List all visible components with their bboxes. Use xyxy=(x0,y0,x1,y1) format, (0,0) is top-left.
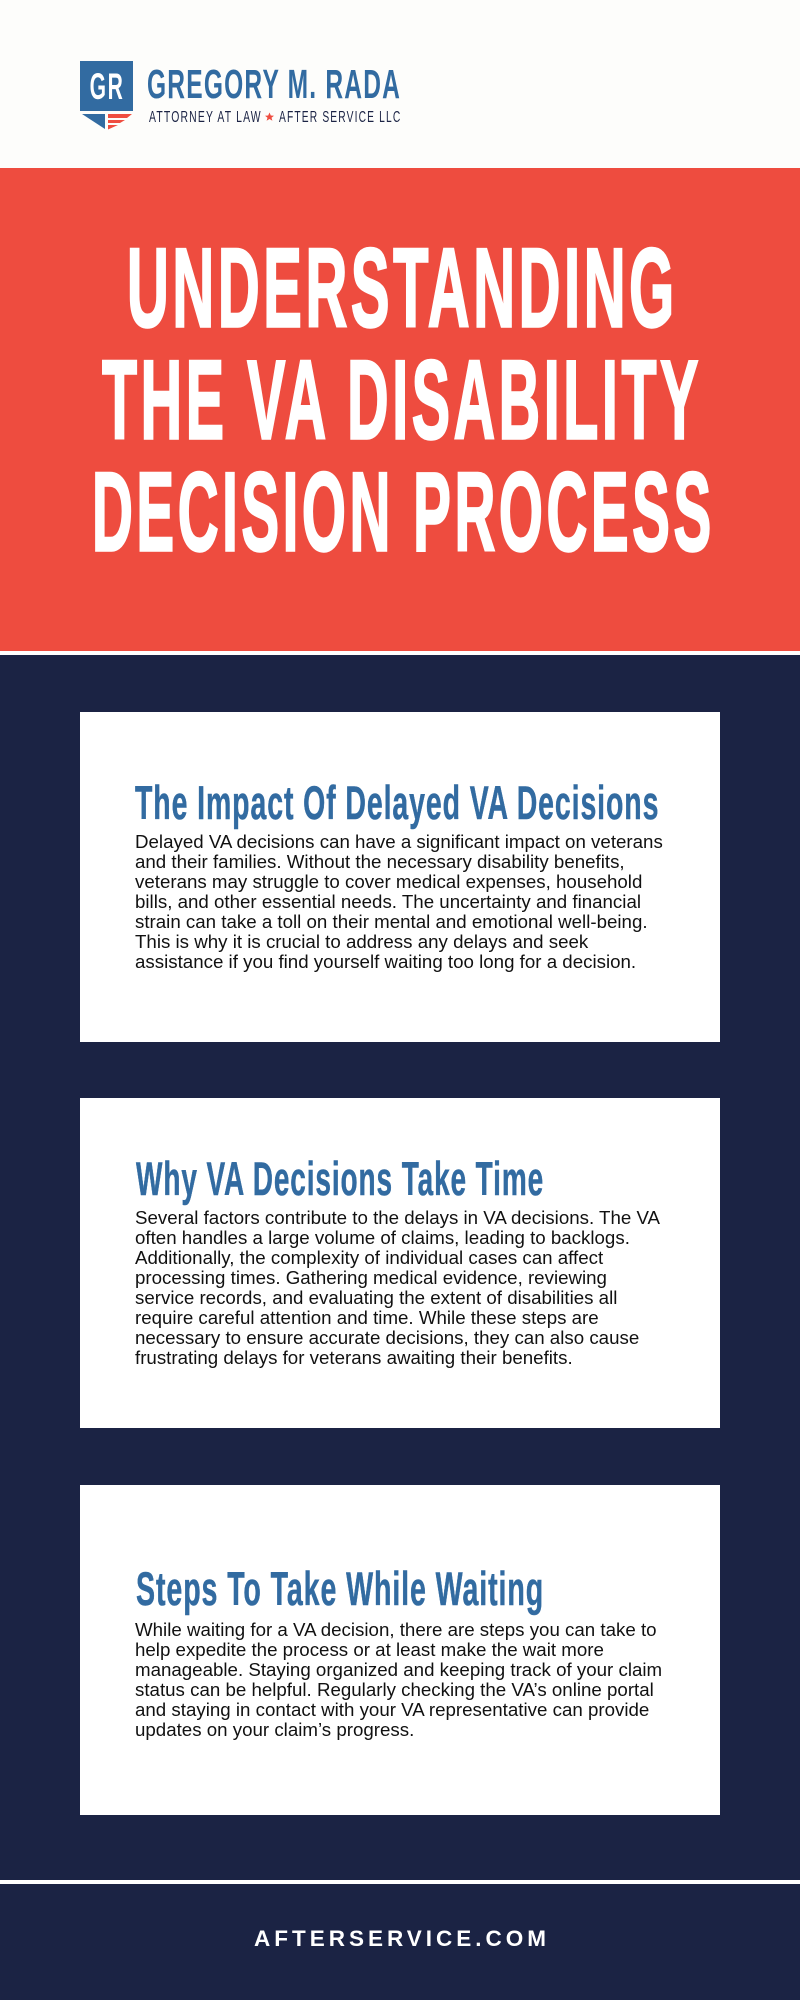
logo tagline xyxy=(149,109,401,126)
text block: Several factors contribute to the delays in VA decisions. The VA xyxy=(135,1207,660,1228)
text block: and their families. Without the necessary disability benefits, xyxy=(135,851,625,872)
panel: steps to take while waiting xyxy=(80,1485,720,1815)
text block: often handles a large volume of claims, leading to backlogs. xyxy=(135,1227,630,1248)
heading: Steps To Take While Waiting xyxy=(136,1562,544,1615)
text block: This is why it is crucial to address any delays and seek xyxy=(135,931,588,952)
text block: manageable. Staying organized and keeping track of your claim xyxy=(135,1659,662,1680)
title: THE VA DISABILITY xyxy=(102,337,702,463)
text block xyxy=(135,1207,660,1368)
text block: help expedite the process or at least make the wait more xyxy=(135,1639,604,1660)
title xyxy=(92,225,715,575)
header band with logo xyxy=(0,0,800,168)
text block: frustrating delays for veterans awaiting their benefits. xyxy=(135,1347,573,1368)
panel: why VA decisions take time xyxy=(80,1098,720,1428)
text block: necessary to ensure accurate decisions, they can also cause xyxy=(135,1327,639,1348)
text block xyxy=(135,831,663,972)
text block: While waiting for a VA decision, there are steps you can take to xyxy=(135,1619,657,1640)
white divider below banner xyxy=(0,651,800,655)
footer website: AFTERSERVICE.COM xyxy=(254,1926,546,1951)
logo name: GREGORY M. RADA xyxy=(147,62,401,107)
text block: processing times. Gathering medical evidence, reviewing xyxy=(135,1267,607,1288)
text block: bills, and other essential needs. The uncertainty and financial xyxy=(135,891,641,912)
title: UNDERSTANDING xyxy=(127,225,678,351)
text block: status can be helpful. Regularly checking the VA’s online portal xyxy=(135,1679,654,1700)
icon: shield with GR xyxy=(80,61,133,130)
title banner xyxy=(0,168,800,651)
text block: updates on your claim’s progress. xyxy=(135,1719,414,1740)
text block: require careful attention and time. While these steps are xyxy=(135,1307,599,1328)
text block: and staying in contact with your VA representative can provide xyxy=(135,1699,649,1720)
logo tagline: AFTER SERVICE LLC xyxy=(279,109,401,126)
icon: shield with GR: GR xyxy=(90,65,125,107)
text block xyxy=(135,1619,662,1740)
panel: the impact of delayed VA decisions xyxy=(80,712,720,1042)
white divider above footer xyxy=(0,1880,800,1884)
text block: assistance if you find yourself waiting too long for a decision. xyxy=(135,951,636,972)
text block: strain can take a toll on their mental and emotional well-being. xyxy=(135,911,648,932)
text block: service records, and evaluating the extent of disabilities all xyxy=(135,1287,617,1308)
text block: veterans may struggle to cover medical expenses, household xyxy=(135,871,642,892)
text block: Additionally, the complexity of individual cases can affect xyxy=(135,1247,603,1268)
heading: Why VA Decisions Take Time xyxy=(136,1152,544,1205)
logo tagline: ATTORNEY AT LAW xyxy=(149,109,262,126)
logo xyxy=(80,61,401,130)
text block: Delayed VA decisions can have a significant impact on veterans xyxy=(135,831,663,852)
